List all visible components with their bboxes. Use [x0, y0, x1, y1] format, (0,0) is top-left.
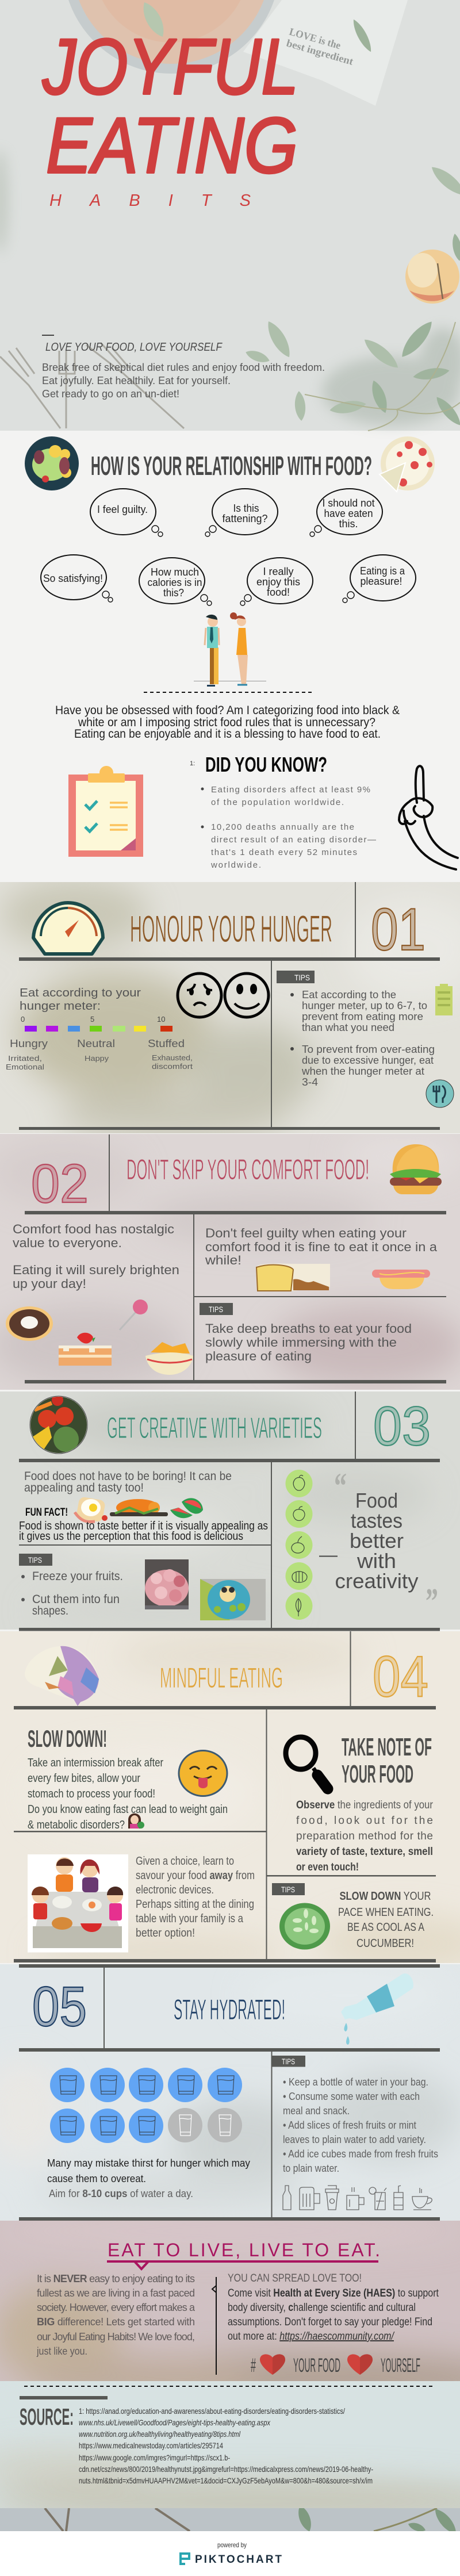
panel: section 2 comfort food [0, 1133, 460, 1390]
hunger meter: Neutral [77, 1038, 115, 1049]
text: thirst: Aim for 8-10 cups of water a day. [49, 2188, 193, 2199]
text: comfort food [13, 1222, 179, 1291]
facts list: of the population worldwide. [211, 798, 344, 807]
bubble: So satisfying [41, 555, 113, 602]
text: spread love: out more at: https://haescommunity.com/ [228, 2330, 394, 2343]
dashed divider [24, 2386, 435, 2387]
panel: section 4 mindful eating: SLOW DOWN! [28, 1725, 107, 1752]
source list: https://www.medicalnewstoday.com/articles/295714 [79, 2441, 223, 2450]
icon: nachos bowl [145, 1342, 193, 1375]
tips text: To prevent from over-eating [302, 1044, 435, 1055]
tips text: Eat according to the [302, 989, 396, 1000]
footnote marker: 1: [190, 760, 195, 767]
source list: cdn.net/csz/news/800/2019/healthynutst.jpg&imgrefurl=https://medicalxpress.com/news/2019-06-healthy- [79, 2464, 373, 2474]
panel: section 5 stay hydrated [0, 1964, 460, 2221]
paragraph [55, 704, 400, 741]
tips text: 3-4 [302, 1076, 318, 1088]
background: red foliage [0, 1133, 460, 1390]
rules [19, 1392, 440, 1631]
tips text: • Add ice cubes made from fresh fruits [283, 2148, 438, 2160]
text: never easy: It is NEVER easy to enjoy eating to its [37, 2273, 195, 2284]
tips text: pleasure of eating [205, 1349, 312, 1363]
facts list: that's 1 death every 52 minutes [211, 848, 357, 857]
tips text: CUCUMBER! [356, 1937, 414, 1950]
text: spread love: YOU CAN SPREAD LOVE TOO! [228, 2272, 362, 2284]
panel: section 4 mindful eating [0, 1631, 460, 1972]
icon: egg on toast [75, 1496, 108, 1523]
footer: powered by piktochart [0, 2531, 460, 2576]
intro text: Break free of skeptical diet rules and enjoy food with freedom. [42, 362, 325, 373]
text: never easy: fullest as we are living in a fast paced [37, 2287, 195, 2299]
illustration: family dining [28, 1854, 128, 1953]
hunger meter: Hungry [10, 1038, 48, 1049]
panel: section 3 varieties [0, 1392, 460, 1631]
image: plate [63, 0, 280, 74]
bracket divider [212, 2277, 216, 2375]
panel: hero [0, 0, 460, 431]
bubble texts: I should not [322, 497, 375, 509]
tips text: • Add slices of fresh fruits or mint [283, 2119, 416, 2131]
source list: https://www.google.com/imgres?imgurl=https://scx1.b- [79, 2453, 230, 2462]
rules [19, 882, 440, 1130]
text: hunger meter [20, 987, 141, 1013]
icon: watermelon [170, 1498, 203, 1518]
icon: tongue emoji [179, 1750, 227, 1796]
hunger meter: 10 [157, 1015, 165, 1023]
tips text [283, 2076, 438, 2174]
icon: tomato [285, 1500, 313, 1528]
text: hunger meter: Eat according to your [20, 987, 141, 999]
tips text: hunger meter, up to 6-7, to [302, 1000, 427, 1011]
text: spread love: body diversity, challenge scientific and cultural [228, 2302, 416, 2314]
text: don't feel guilty: Don't feel guilty when eating your [205, 1226, 407, 1240]
source bar [20, 2396, 108, 2399]
quote: with [356, 1549, 396, 1573]
number 03: 03 [373, 1396, 431, 1457]
icon: salad [25, 436, 79, 490]
heading: did you know: DID YOU KNOW? [205, 753, 327, 776]
bubble: I should not [310, 489, 382, 536]
bubble texts: Eating is a [360, 565, 405, 577]
tips label: TIPS [282, 2057, 295, 2066]
text: never easy [36, 2273, 195, 2357]
panel: sources [0, 2381, 460, 2508]
paragraph: Eating can be enjoyable and it is a blessing to have food to eat. [74, 727, 381, 741]
paragraph: white or am I imposing strict food rules that is unnecessary? [78, 716, 375, 729]
text: thirst: cause them to overeat. [47, 2173, 146, 2184]
text: don't feel guilty [205, 1226, 438, 1267]
text: away from devices: Given a choice, learn to [136, 1855, 234, 1868]
water glasses chart [50, 2068, 242, 2143]
image: napkin leaf [350, 17, 375, 54]
panel: sources: SOURCE: [20, 2404, 74, 2430]
tips text: when the hunger meter at [301, 1065, 424, 1077]
source list: www.nutrition.org.uk/healthyliving/healthyeating/8tips.html [79, 2429, 241, 2439]
icon: donut [6, 1306, 53, 1341]
panel: section 6 eat to live [0, 2221, 460, 2381]
quote: better [350, 1529, 404, 1552]
bubble texts: pleasure! [360, 576, 402, 587]
hashtag: # [251, 2355, 256, 2376]
icon: geometric brain [25, 1646, 99, 1706]
tips label [271, 2056, 305, 2067]
hashtag [251, 2354, 420, 2376]
background: warm texture [0, 1631, 460, 1972]
bubble: How much calories [139, 558, 212, 605]
hunger meter: Happy [85, 1054, 109, 1063]
rules [25, 1134, 446, 1383]
icon: leaf [285, 1592, 313, 1620]
quote: creativity [335, 1569, 419, 1593]
rules [14, 1631, 436, 1962]
thought bubbles [41, 489, 416, 605]
image: blurred greenery [0, 150, 460, 425]
text: fun fact [19, 1520, 268, 1543]
text: slow down: & metabolic disorders? [28, 1819, 125, 1831]
photo: frozen fruits [145, 1559, 189, 1609]
bubble texts: calories is in [147, 577, 202, 588]
tips label: TIPS [209, 1305, 223, 1314]
bubble texts: I really [263, 566, 293, 577]
text: slow down: Take an intermission break after [28, 1757, 163, 1769]
text: spread love [228, 2272, 439, 2343]
text: observe: variety of taste, texture, smell [296, 1846, 433, 1858]
panel: section 1 honour your hunger [0, 880, 460, 1138]
rules [19, 1964, 440, 2221]
heading: EAT TO LIVE, LIVE TO EAT. [108, 2240, 380, 2260]
text: thirst [47, 2157, 250, 2199]
icons: drinks [283, 2186, 432, 2210]
bubble texts: enjoy this [256, 576, 300, 588]
tips label [272, 1883, 305, 1895]
title: EATING [46, 102, 298, 190]
hunger meter: Stuffed [148, 1038, 185, 1049]
text: away from devices [136, 1855, 255, 1939]
icon: happy face [225, 973, 269, 1017]
quote [319, 1465, 438, 1621]
text: observe: or even touch! [296, 1861, 359, 1873]
icon: water bottle [341, 1973, 413, 2045]
tips text: leaves to plain water to add variety. [283, 2134, 426, 2145]
tips text: Freeze your fruits. [32, 1570, 123, 1583]
text: slow down: every few bites, allow your [28, 1772, 140, 1785]
hunger meter: 0 [21, 1015, 25, 1023]
tips text: than what you need [302, 1022, 394, 1033]
tagline: LOVE YOUR FOOD, LOVE YOURSELF [45, 341, 223, 354]
tips text: • Keep a bottle of water in your bag. [283, 2076, 428, 2088]
text: observe: food, look out for the [296, 1815, 433, 1827]
text: comfort food: Comfort food has nostalgic [13, 1222, 174, 1236]
icon: strawberry cake [59, 1333, 112, 1366]
text: fun fact: Food is shown to taste better if it is visually appealing as [19, 1520, 268, 1532]
bubble texts: have eaten [324, 508, 373, 519]
text: slow down: Do you know eating fast can lead to weight gain [28, 1803, 228, 1816]
tips text: BE AS COOL AS A [347, 1921, 425, 1934]
icon: clipboard [68, 766, 143, 857]
icon: lollipop [120, 1300, 148, 1330]
icon: plate and cutlery [426, 1080, 454, 1107]
text: observe: preparation method for the [296, 1830, 433, 1842]
tips text: shapes. [32, 1604, 68, 1617]
heading: take note [342, 1733, 432, 1788]
icon: cucumber [279, 1903, 330, 1949]
tips label: TIPS [294, 973, 310, 982]
icon: gauge [33, 903, 103, 954]
text: comfort food: Eating it will surely brighten [13, 1263, 179, 1277]
panel: section 5 stay hydrated: STAY HYDRATED! [174, 1994, 285, 2026]
bubble texts: How much [151, 566, 199, 578]
number 02: 02 [31, 1153, 89, 1214]
facts list: worldwide. [210, 860, 261, 870]
tips text: prevent from eating more [302, 1011, 423, 1022]
icon: battery [435, 984, 453, 1015]
intro text: Get ready to go on an un-diet! [42, 388, 179, 400]
panel: relationship with food [25, 436, 458, 870]
background: autumn leaves [0, 880, 460, 1138]
bubble: I really enjoy [240, 558, 313, 605]
hunger meter: 5 [90, 1015, 94, 1023]
text: away from devices: savour your food away from [136, 1869, 255, 1882]
heading: MINDFUL EATING [160, 1662, 283, 1694]
icon: apple [285, 1470, 313, 1497]
icon: pointing hand [399, 766, 458, 869]
source list: nuts.html&tbnid=x5dmvHUAAPHV2M&vet=1&docid=CXJyGzF5ebAyoM&w=800&h=480&source=sh/x/im [79, 2476, 373, 2485]
icon: burger [390, 1144, 442, 1194]
source list: www.nhs.uk/Livewell/Goodfood/Pages/eight-tips-healthy-eating.aspx [79, 2418, 271, 2427]
background: grey foliage [0, 1392, 460, 1630]
quote: ” [425, 1581, 438, 1621]
icons: produce circles [285, 1470, 313, 1620]
napkin text [285, 26, 355, 67]
text: not boring: appealing and tasty too! [24, 1481, 144, 1494]
icon: magnifying glass [286, 1737, 328, 1789]
background: flower field [0, 2221, 460, 2381]
text: away from devices: electronic devices. [136, 1884, 214, 1896]
tips text: to plain water. [283, 2163, 339, 2174]
text: spread love: Come visit Health at Every Size (HAES) to support [228, 2287, 439, 2299]
tips label [200, 1303, 233, 1315]
intro text [42, 362, 325, 400]
text: hunger meter: hunger meter: [20, 1000, 101, 1013]
image: napkin [243, 0, 408, 106]
bubble: I feel guilty [90, 489, 163, 536]
text: not boring [24, 1470, 232, 1494]
icon: sad face [178, 973, 221, 1017]
tips text [338, 1890, 434, 1950]
icon: hot dog [372, 1270, 430, 1289]
tips text: Cut them into fun [32, 1593, 120, 1606]
tips label [277, 971, 315, 983]
hunger meter: discomfort [152, 1062, 193, 1071]
quote: Food [355, 1489, 398, 1512]
tips label: TIPS [28, 1555, 42, 1565]
bubble texts [43, 497, 405, 599]
bubble texts: this. [339, 518, 358, 530]
text: observe: Observe the ingredients of your [296, 1799, 434, 1811]
icon: girl with question [128, 1814, 144, 1828]
text: never easy: just like you. [36, 2345, 87, 2357]
number 04: 04 [373, 1644, 428, 1709]
image: vegetables [30, 1396, 87, 1454]
tips text: SLOW DOWN YOUR [339, 1890, 431, 1903]
text: never easy: society. However, every effort makes a [37, 2302, 195, 2313]
background: pale foliage [0, 2381, 460, 2508]
hunger meter: Irritated, [8, 1054, 42, 1063]
tips text [290, 989, 435, 1088]
number 05: 05 [32, 1975, 87, 2038]
bubble texts: fattening? [222, 513, 268, 524]
facts list: Eating disorders affect at least 9% [211, 785, 370, 795]
quote: tastes [351, 1509, 402, 1532]
illustration: man and woman [194, 612, 266, 687]
text: don't feel guilty: while! [205, 1253, 241, 1267]
bubble: Is this fattening [205, 489, 278, 536]
image: forks [0, 343, 184, 428]
intro text: Eat joyfully. Eat healthily. Eat for yourself. [42, 375, 231, 386]
source list: 1: https://anad.org/education-and-awareness/about-eating-disorders/eating-disorders-statistics/ [79, 2406, 345, 2416]
bubble texts: food! [267, 586, 290, 598]
tips text: PACE WHEN EATING. [338, 1906, 434, 1919]
icon: roast turkey [110, 1499, 168, 1516]
logo icon [181, 2554, 189, 2564]
text: don't feel guilty: comfort food it is fine to eat it once in a [205, 1240, 438, 1254]
source list [79, 2406, 373, 2485]
text: not boring: Food does not have to be boring! It can be [24, 1470, 232, 1483]
tips text: • Consume some water with each [283, 2091, 420, 2102]
logo text: PIKTOCHART [195, 2554, 282, 2566]
text: slow down [28, 1757, 228, 1831]
tips label [19, 1554, 52, 1566]
tips text: slowly while immersing with the [205, 1335, 397, 1350]
tips text: due to excessive hunger, eat [302, 1055, 434, 1066]
hunger meter [6, 1015, 193, 1071]
label: fun fact: FUN FACT! [25, 1506, 68, 1519]
bubble texts: Is this [233, 503, 259, 514]
text: observe [296, 1799, 434, 1873]
text: away from devices: Perhaps sitting at the dining [136, 1898, 254, 1911]
facts list: direct result of an eating disorder— [211, 835, 376, 845]
speech bar [107, 2261, 378, 2269]
dashed divider [144, 692, 314, 693]
text: away from devices: table with your family is a [136, 1912, 244, 1925]
text: fun fact: it gives us the perception that this food is delicious [19, 1530, 243, 1543]
text: thirst: Many may mistake thirst for hunger which may [47, 2157, 250, 2169]
text: away from devices: better option! [136, 1927, 195, 1939]
facts list [201, 785, 376, 870]
hunger meter: Emotional [6, 1063, 44, 1071]
text: never easy: BIG difference! Lets get started with [37, 2316, 195, 2328]
icon: lettuce [285, 1562, 313, 1590]
icon: orange [285, 1531, 313, 1559]
background: blue grey foliage [0, 1964, 460, 2221]
icon: pizza [379, 436, 435, 492]
title [42, 23, 298, 190]
subtitle: HABITS [49, 191, 251, 210]
image: leaves [244, 162, 460, 428]
bubble texts: I feel guilty. [97, 504, 148, 515]
bubble texts: this? [163, 587, 184, 599]
icon: loaf cake [256, 1264, 330, 1291]
paragraph: Have you be obsessed with food? Am I categorizing food into black & [55, 704, 400, 717]
bubble texts: So satisfying! [43, 573, 103, 584]
tips text [21, 1570, 123, 1617]
hashtag: YOUR FOOD [293, 2355, 340, 2376]
napkin text: LOVE is the [288, 26, 342, 51]
text: slow down: stomach to process your food! [28, 1788, 155, 1800]
powered by: powered by [217, 2541, 247, 2549]
title: JOYFUL [42, 23, 298, 111]
text: comfort food: value to everyone. [13, 1236, 122, 1250]
image: plate leaf [138, 0, 169, 40]
photo: owl fruit plate [200, 1579, 266, 1620]
tips text: Take deep breaths to eat your food [205, 1321, 412, 1336]
panel: bottom photo strip [0, 2508, 460, 2531]
image: branches [305, 322, 460, 431]
tips text [205, 1321, 412, 1363]
text: never easy: our Joyful Eating Habits! We love food, [37, 2331, 195, 2343]
facts list: 10,200 deaths annually are the [211, 822, 354, 832]
bubble: Eating is a pleasure [343, 555, 416, 603]
text: comfort food: up your day! [13, 1276, 86, 1291]
tips label: TIPS [281, 1885, 295, 1894]
quote: “ [334, 1465, 347, 1506]
image: apple [405, 250, 459, 304]
number 01: 01 [371, 896, 425, 963]
tips text: meal and snack. [283, 2105, 350, 2117]
hunger meter: Exhausted, [152, 1053, 193, 1062]
napkin text: best ingredient [285, 37, 355, 67]
